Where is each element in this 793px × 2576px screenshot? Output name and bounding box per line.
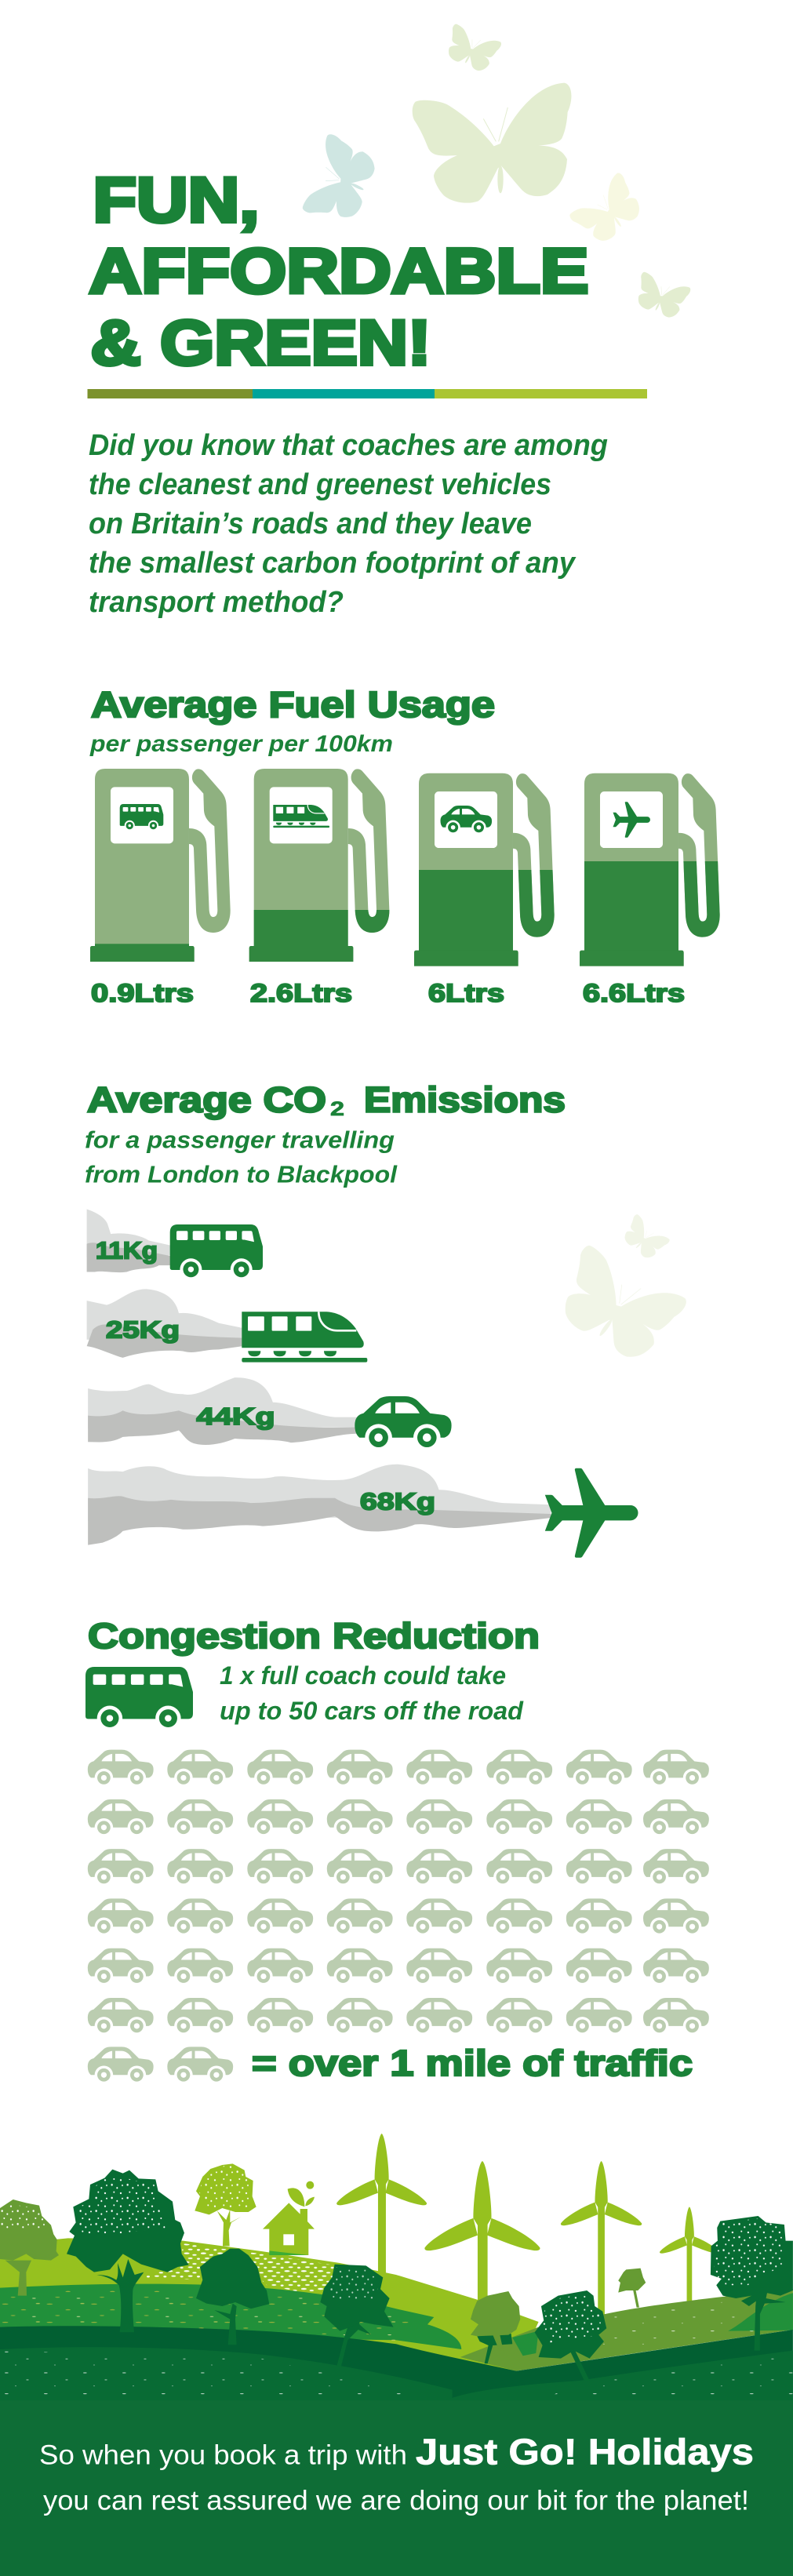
wind turbines bbox=[336, 2134, 719, 2319]
value labels: kilograms: 44Kg bbox=[196, 1403, 275, 1430]
smoke: coach bbox=[87, 1210, 171, 1272]
car row 6 bbox=[88, 1998, 709, 2036]
panel: congestion reduction bbox=[85, 1616, 709, 2084]
smoke: car bbox=[88, 1377, 357, 1445]
value labels: litres: 2.6Ltrs bbox=[250, 979, 352, 1007]
value labels: litres: 0.9Ltrs bbox=[91, 979, 194, 1007]
tree: dark centre bbox=[320, 2265, 394, 2367]
fuel pump: coach bbox=[90, 769, 231, 962]
cars pictogram: 50 cars bbox=[88, 1750, 709, 2084]
value labels: kilograms: 11Kg bbox=[96, 1236, 158, 1264]
butterfly: small right bbox=[629, 266, 692, 323]
smoke: train bbox=[87, 1289, 243, 1358]
hills bbox=[0, 2238, 793, 2400]
title: FUN, bbox=[93, 165, 259, 235]
value labels: kilograms bbox=[96, 1236, 435, 1515]
icon: train emissions bbox=[242, 1312, 367, 1363]
panel: landscape footer bbox=[0, 2134, 793, 2576]
intro paragraph bbox=[89, 429, 608, 619]
butterfly: faded large bbox=[544, 1233, 689, 1372]
heading: CO2 emissions bbox=[87, 1079, 566, 1120]
value labels: kilograms: 25Kg bbox=[106, 1316, 180, 1343]
butterfly: large pale green bbox=[413, 83, 571, 203]
panel: average fuel usage bbox=[89, 684, 720, 1007]
title: AFFORDABLE bbox=[89, 236, 588, 307]
fuel pump: train bbox=[249, 769, 389, 962]
subheading: London to Blackpool: for a passenger travelling bbox=[85, 1126, 395, 1153]
tree: small olive distant bbox=[618, 2269, 646, 2308]
icon: coach emissions bbox=[170, 1224, 263, 1280]
title bbox=[89, 165, 588, 378]
icon: coach congestion bbox=[85, 1667, 193, 1731]
text: coach capacity bbox=[220, 1661, 524, 1725]
value labels: litres bbox=[91, 979, 685, 1007]
intro paragraph: the smallest carbon footprint of any bbox=[89, 547, 577, 580]
car row 3 bbox=[88, 1849, 709, 1887]
butterfly: cream bbox=[564, 172, 648, 251]
text: coach capacity: 1 x full coach could take bbox=[220, 1661, 506, 1690]
subheading: London to Blackpool: from London to Blackpool bbox=[85, 1161, 398, 1188]
butterfly: teal bbox=[293, 133, 384, 232]
title: & GREEN! bbox=[91, 307, 431, 378]
value labels: litres: 6.6Ltrs bbox=[583, 979, 685, 1007]
butterflies: header bbox=[293, 18, 692, 323]
text: coach capacity: up to 50 cars off the road bbox=[220, 1697, 524, 1725]
heading: CO2 emissions: Average CO bbox=[87, 1079, 326, 1120]
icon: eco house bbox=[263, 2181, 315, 2255]
fuel pump: plane bbox=[580, 773, 720, 966]
panel: average CO2 emissions bbox=[85, 1079, 689, 1558]
closing message bbox=[39, 2432, 754, 2516]
closing message: you can rest assured we are doing our bit for the planet! bbox=[43, 2485, 749, 2516]
closing message: Just Go! Holidays bbox=[416, 2432, 754, 2472]
smoke: plane bbox=[88, 1464, 551, 1545]
car row 7 bbox=[88, 2047, 233, 2084]
car row 2 bbox=[88, 1799, 709, 1837]
subheading: per passenger: per passenger per 100km bbox=[89, 731, 393, 757]
tree: dark centre-left bbox=[196, 2249, 269, 2345]
car row 1 bbox=[88, 1750, 709, 1787]
icon: car emissions bbox=[355, 1396, 452, 1451]
tree: dark right-centre bbox=[535, 2290, 606, 2381]
butterfly: small top bbox=[439, 18, 503, 77]
icon: plane emissions bbox=[545, 1468, 638, 1558]
intro paragraph: on Britain’s roads and they leave bbox=[89, 508, 532, 540]
car row 4 bbox=[88, 1898, 709, 1936]
fuel pump: car bbox=[414, 773, 555, 966]
heading: congestion reduction: Congestion Reduction bbox=[88, 1616, 540, 1656]
tricolour divider bar bbox=[88, 389, 647, 398]
callout: over 1 mile of traffic: = over 1 mile of traffic bbox=[252, 2043, 693, 2083]
tree: dark right edge bbox=[711, 2216, 793, 2351]
tree: olive centre bbox=[471, 2291, 520, 2363]
butterfly: faded small bbox=[617, 1210, 671, 1264]
heading: CO2 emissions: Emissions bbox=[364, 1079, 566, 1120]
smoke clouds bbox=[87, 1210, 551, 1545]
heading: fuel usage: Average Fuel Usage bbox=[91, 684, 495, 725]
closing message: So when you book a trip with bbox=[39, 2440, 407, 2471]
landscape illustration bbox=[0, 2134, 793, 2400]
car row 5 bbox=[88, 1948, 709, 1985]
footer background bbox=[0, 2400, 793, 2576]
intro paragraph: the cleanest and greenest vehicles bbox=[89, 468, 551, 501]
intro paragraph: transport method? bbox=[89, 586, 344, 619]
tree: dark large bbox=[67, 2170, 189, 2332]
heading: CO2 emissions: 2 bbox=[330, 1098, 344, 1120]
intro paragraph: Did you know that coaches are among bbox=[89, 429, 608, 462]
tree: olive left bbox=[0, 2199, 59, 2296]
value labels: litres: 6Ltrs bbox=[428, 979, 504, 1007]
tree: lime bbox=[195, 2163, 256, 2246]
subheading: London to Blackpool bbox=[85, 1126, 398, 1188]
value labels: kilograms: 68Kg bbox=[360, 1487, 435, 1515]
